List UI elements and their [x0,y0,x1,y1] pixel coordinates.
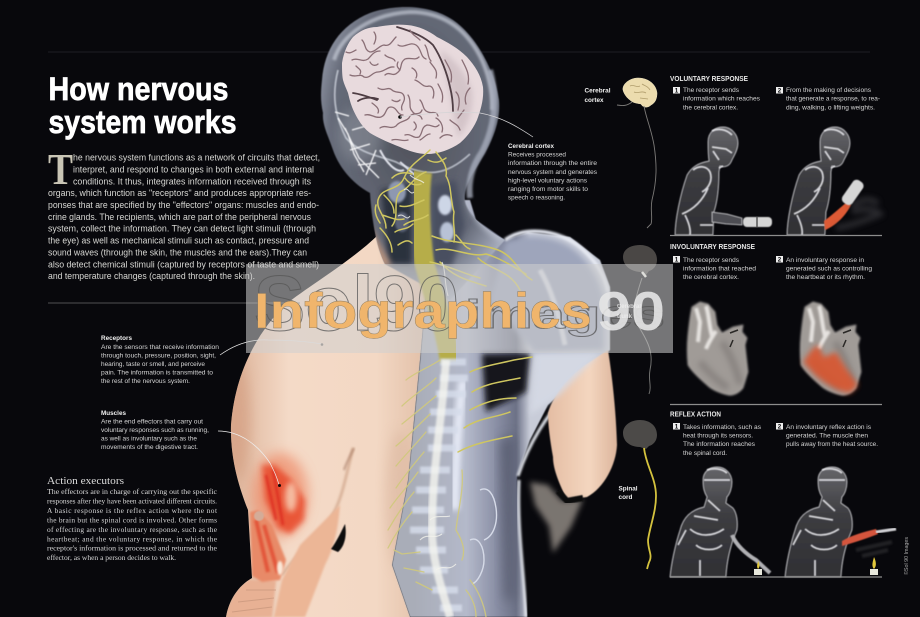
panel: reflex action: heat through its sensors. [683,432,753,440]
receptors text: hearing, taste or smell, and perceive [101,361,205,368]
panel: voluntary response: From the making of decisions [786,87,871,94]
watermark [246,259,673,353]
cerebral cortex text: Cerebral cortex [508,143,554,150]
label: cerebral cortex [584,88,611,104]
right arm [548,350,617,500]
panel: voluntary response: The receptor sends [683,87,739,94]
receptors text: Are the sensors that receive information [101,344,219,351]
figure: hand over candle [670,467,770,577]
cerebral cortex text: information through the entire [508,160,597,167]
skin shading [226,360,414,617]
label: spinal cord [618,486,638,501]
intro text: system, collect the information. They can detect light stimuli (through [48,224,316,235]
intro text: the eye) as well as mechanical stimuli such as contact, pressure and [48,236,309,247]
left arm and back skin [226,235,428,617]
figure: man lifting dumbbell [787,127,882,235]
label: trunk: Cerebral [617,304,641,310]
brain [342,25,483,154]
label: cerebral cortex: cortex [584,97,604,104]
watermark: 90 [597,280,665,342]
muscles text [101,410,209,451]
armpit gap [331,524,346,552]
intro text: and temperature changes (captured through the skin). [48,271,255,282]
panel: voluntary response [670,76,882,236]
forearm [274,505,340,617]
leader: muscles [218,431,279,485]
leader: receptors [220,340,322,355]
top rule [48,51,870,53]
baseline [670,404,882,406]
intro text: ponses that are specified by the "effectors" organs: muscles and endo- [48,200,319,211]
panel: reflex action: The information reaches [683,441,755,448]
panel: reflex action [670,412,896,577]
panel: involuntary response: 1 [675,256,679,264]
figure: hand pulled from heat [785,467,896,577]
action executors: heartbeat; and the voluntary response, in which the [47,534,218,543]
receptors text [101,335,219,385]
red muscle [250,453,308,582]
action executors: the brain but the spinal cord is involved. Other forms [47,515,217,524]
cerebral cortex text: speech o reasoning. [508,195,565,202]
cerebral cortex text: nervous system and generates [508,169,597,176]
intro text: crine glands. The recipients, which are part of the peripheral nervous [48,212,311,223]
action executors: Action executors [47,475,124,487]
muscles text: movements of the digestive tract. [101,444,198,451]
head outline highlights [334,12,494,198]
receptors text: through touch, pressure, position, sight, [101,352,216,359]
panel: voluntary response: the cerebral cortex. [683,104,738,111]
intro text [48,145,320,282]
panel: involuntary response: An involuntary response in [786,257,864,264]
muscles text: Muscles [101,410,126,417]
credit: ©Sol 90 Images [903,537,910,575]
back shadows [455,231,608,617]
action executors [47,475,218,562]
panel: voluntary response: information which reaches [683,96,760,103]
intro text: T [48,145,73,194]
receptors text: Receptors [101,335,132,342]
label: spinal cord: Spinal [618,486,638,492]
panel: voluntary response: ding, walking, o lifting weights. [786,104,875,111]
title [48,71,236,140]
intro text: interpret, and respond to changes in both external and internal [73,164,314,176]
panel: involuntary response [670,244,882,404]
torso glass [392,200,610,617]
panel: voluntary response: 2 [778,88,782,94]
leader: cerebral cortex [400,112,533,137]
label: trunk [617,304,641,320]
panel: reflex action: An involuntary reflex action is [786,424,871,431]
hand [226,580,276,617]
anatomical figure [226,7,617,617]
title: How nervous [48,71,228,107]
cerebral cortex text: high-level voluntary actions [508,177,587,184]
panel: involuntary response: INVOLUNTARY RESPONSE [670,244,755,251]
panel: involuntary response: 2 [778,256,782,264]
panel: voluntary response: 1 [675,88,679,94]
yellow nerve branches [375,150,532,452]
panel: reflex action: the spinal cord. [683,450,727,457]
intro text: conditions. It thus, integrates information received through its [73,176,311,187]
cerebral cortex text [508,143,597,202]
brain folds [346,27,470,141]
baseline [670,576,882,578]
action executors: A basic response is the reflex action where the not [47,506,218,515]
panel: involuntary response: information that reached [683,266,756,272]
label: cerebral cortex: Cerebral [584,88,611,94]
label: spinal cord: cord [618,494,632,501]
muscles text: voluntary responses such as running, [101,427,209,434]
label: trunk: trunk [617,314,633,320]
intro text: organs, which function as "receptors" and produces appropriate res- [48,188,311,199]
panel: involuntary response: The receptor sends [683,257,739,264]
baseline [670,234,882,236]
cerebral cortex text: Receives processed [508,152,566,159]
action executors: of effecting are the involuntary response, such as the [47,525,218,534]
panel: reflex action: 1 [675,424,679,430]
panel: reflex action: pulls away from the heat source. [786,441,878,448]
panel: reflex action: 2 [778,424,782,430]
heart: activated [800,302,861,395]
faded forearm [530,482,583,553]
title: system works [48,104,236,140]
intro text: also detect chemical stimuli (captured by receptors of taste and smell) [48,259,319,270]
heart: normal [687,302,748,395]
spinal cord and nerves [375,150,532,617]
action executors: receptor's information is processed and returned to the [47,544,218,553]
action executors: effector, as when a person decides to walk. [47,553,176,562]
panel: reflex action: REFLEX ACTION [670,412,721,418]
panel: involuntary response: the cerebral cortex. [683,274,739,281]
receptors text: pain. The information is transmitted to [101,369,213,376]
head glass [321,7,505,300]
vertebrae [410,362,468,608]
mini brain: cerebral cortex [617,78,657,228]
panel: reflex action: generated. The muscle then [786,432,868,440]
panel: voluntary response: that generate a response, to rea- [786,96,880,103]
mini brain: trunk [623,245,657,394]
intro text: he nervous system functions as a network of circuits that detect, [73,153,320,164]
action executors: responses after they have been activated different circuits. [47,496,217,506]
watermark: Infographics [254,283,592,339]
cerebral cortex text: ranging from motor skills to [508,186,588,193]
panel: involuntary response: generated such as controlling [786,266,872,272]
muscles text: as well as involuntary such as the [101,435,197,442]
muscles text: Are the end effectors that carry out [101,418,203,425]
intro text: sound waves (through the skin, the muscles and the ears).They can [48,247,307,258]
receptors text: the rest of the nervous system. [101,378,190,385]
panel: reflex action: Takes information, such as [683,424,761,431]
figure: man holding dumbbell low [675,127,772,235]
action executors: The effectors are in charge of carrying out the specific [47,487,218,496]
brain shading [440,50,472,138]
watermark: images [465,293,665,337]
glass arm band [530,353,600,415]
panel: voluntary response: VOLUNTARY RESPONSE [670,76,748,83]
panel: involuntary response: the heartbeat or its rhythm. [786,274,865,281]
neck vessels [338,107,503,266]
divider [48,302,300,304]
mini brain and spinal cord [623,420,657,569]
watermark: Sol90 [254,259,459,347]
